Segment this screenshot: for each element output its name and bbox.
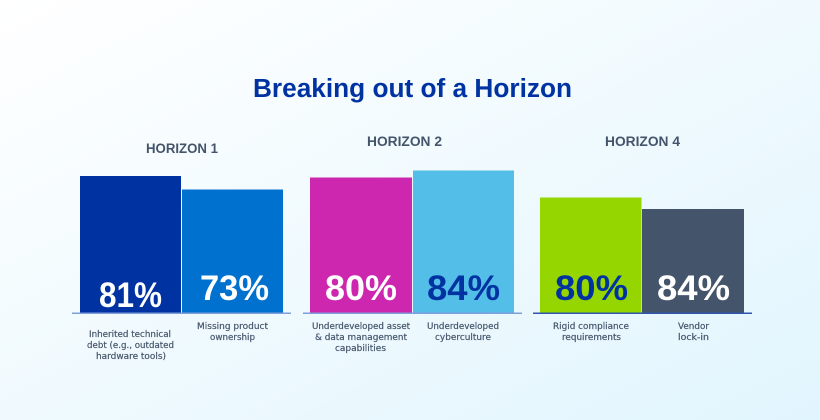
label: inherited technical debt: Inherited technical [89,330,171,340]
value: 84%: 84% [427,269,500,308]
panel: horizon 2 [303,134,522,354]
panel: horizon 1 [72,141,291,362]
label: rigid compliance: Rigid compliance [553,322,629,332]
label: cyberculture [427,322,499,343]
label: vendor lock-in: lock-in [678,333,709,343]
bar: inherited technical debt [80,176,181,313]
heading: horizon 2: HORIZON 2 [367,134,442,149]
bar: cyberculture [413,170,514,313]
bar: asset and data management [310,178,412,313]
label: asset and data management: & data management [315,333,408,343]
value: 73%: 73% [200,269,269,308]
label: rigid compliance [553,322,629,343]
heading: horizon 1: HORIZON 1 [146,141,218,156]
label: asset and data management: Underdeveloped asset [312,322,411,332]
value: 80%: 80% [555,269,628,308]
heading: horizon 4: HORIZON 4 [605,134,680,149]
label: vendor lock-in [678,322,709,343]
value: 84%: 84% [657,269,730,308]
value: 81%: 81% [99,276,162,315]
label: cyberculture: Underdeveloped [427,322,499,332]
label: cyberculture: cyberculture [435,333,491,343]
label: inherited technical debt [87,330,174,362]
value: 80%: 80% [325,269,397,308]
panel: horizon 4 [533,134,752,343]
baseline [303,312,522,314]
bar: vendor lock-in [642,209,744,313]
baseline [72,312,291,314]
label: missing product ownership: ownership [210,333,255,343]
label: rigid compliance: requirements [562,333,621,343]
bar: missing product ownership [182,190,283,313]
label: missing product ownership: Missing product [197,322,269,332]
label: asset and data management: capabilities [335,344,386,354]
label: inherited technical debt: debt (e.g., outdated [87,341,174,351]
baseline [533,312,752,314]
label: asset and data management [312,322,411,354]
label: vendor lock-in: Vendor [678,322,709,332]
label: inherited technical debt: hardware tools) [96,352,166,362]
bar: rigid compliance [540,198,642,313]
label: missing product ownership [197,322,269,343]
title: Breaking out of a Horizon [253,75,572,103]
